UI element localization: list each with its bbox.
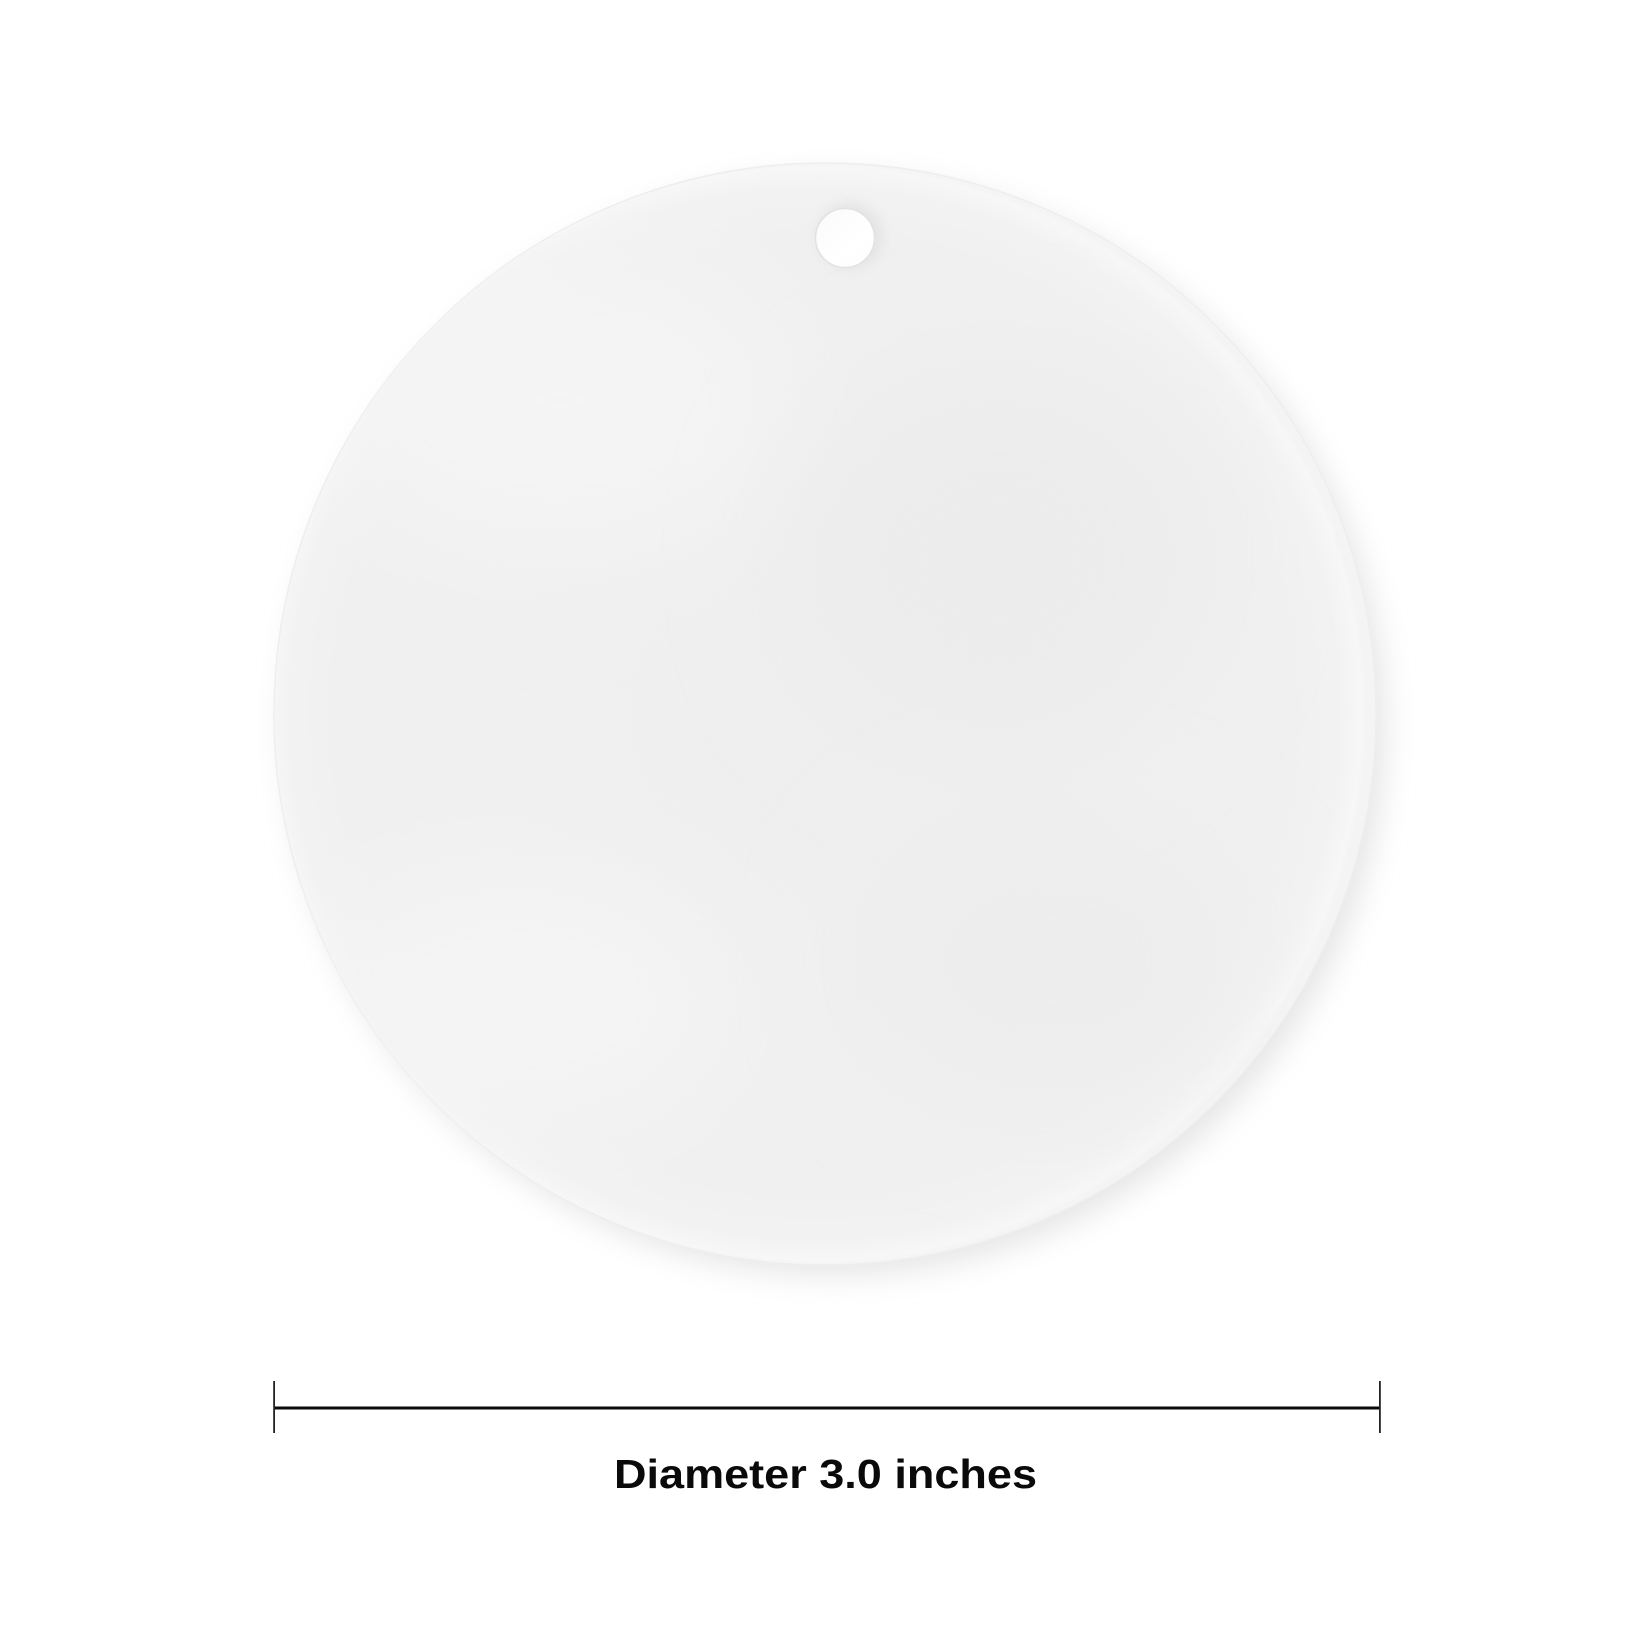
disc body (274, 163, 1376, 1265)
left tick (273, 1381, 275, 1433)
product diagram (273, 162, 1392, 1488)
diameter dimension bar (273, 1381, 1381, 1433)
acrylic disc ornament (274, 163, 1384, 1274)
right tick (1379, 1381, 1381, 1433)
disc surface tone (310, 250, 1230, 1130)
hanging hole (816, 208, 874, 268)
disc shadow (288, 178, 1384, 1274)
hole shadow (817, 203, 883, 269)
dimension line (274, 1406, 1380, 1410)
diameter label: Diameter 3.0 inches (614, 1451, 1037, 1497)
